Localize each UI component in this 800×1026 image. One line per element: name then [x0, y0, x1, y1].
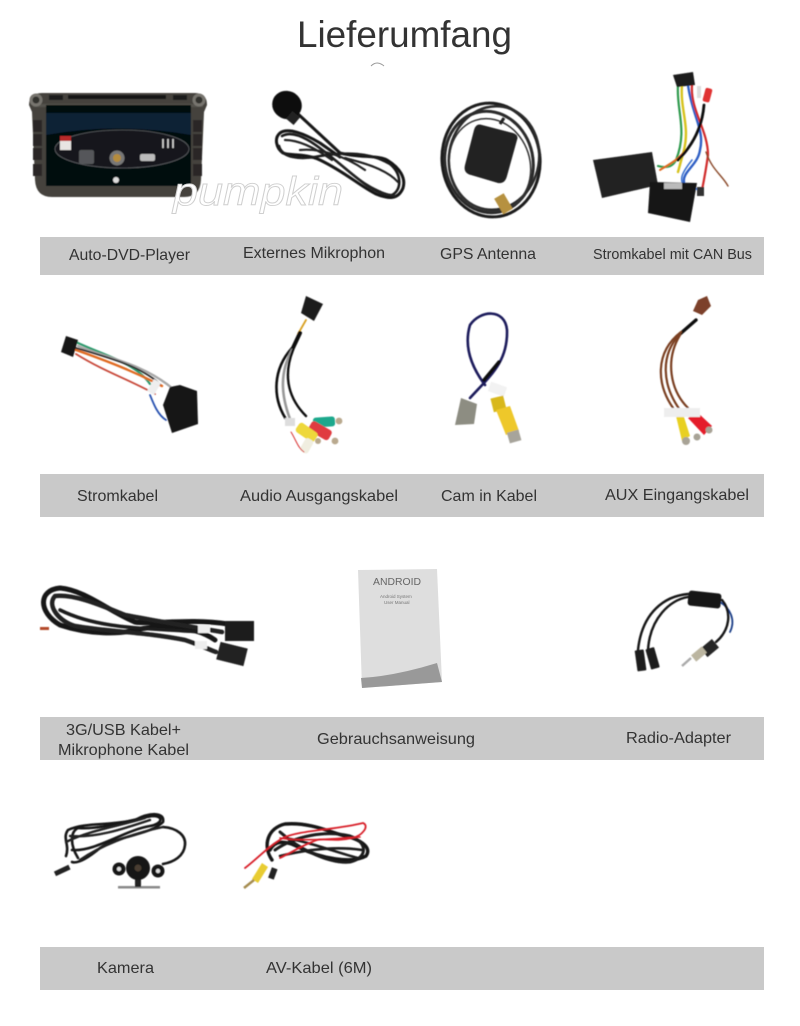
- label: Kamera: Kamera: [97, 960, 154, 977]
- label bar: row 2: [40, 474, 764, 517]
- icon: Android user manual: ANDROID: [373, 577, 421, 588]
- label: 3G/USB cable and microphone cable: [58, 722, 189, 759]
- label: 3G/USB cable and microphone cable: Mikrophone Kabel: [58, 742, 189, 759]
- label: Auto-DVD-Player: Auto-DVD-Player: [69, 247, 191, 264]
- icon: GPS antenna: [435, 98, 547, 222]
- label: GPS Antenna: GPS Antenna: [440, 246, 536, 263]
- title: Lieferumfang: [297, 14, 512, 55]
- icon: rear-view camera: [54, 814, 185, 888]
- icon: Android user manual: Android System: [380, 594, 412, 599]
- label: Externes Mikrophon: Externes Mikrophon: [243, 245, 385, 262]
- icon: Android user manual: [358, 569, 442, 688]
- icon: audio output cable: [276, 296, 342, 455]
- label: Stromkabel mit CAN Bus: Stromkabel mit CAN Bus: [593, 247, 752, 263]
- icon: power cable: [61, 336, 198, 433]
- icon: Android user manual: User Manual: [384, 600, 410, 605]
- icon: camera input cable: [455, 314, 521, 443]
- icon: 3G/USB and microphone cable: [40, 588, 254, 666]
- icon: power cable with CAN bus: [593, 72, 728, 222]
- label: AUX Eingangskabel: AUX Eingangskabel: [605, 487, 749, 504]
- icon: external microphone: [267, 86, 404, 198]
- label: AV-Kabel (6M): AV-Kabel (6M): [266, 960, 372, 977]
- label: Cam in Kabel: Cam in Kabel: [441, 488, 537, 505]
- icon: AUX input cable: [661, 296, 712, 445]
- label bar: row 3: [40, 717, 764, 760]
- label: Audio Ausgangskabel: Audio Ausgangskabel: [240, 488, 398, 505]
- label: Radio-Adapter: Radio-Adapter: [626, 730, 732, 747]
- icon: car DVD player: [29, 93, 207, 197]
- icon: radio adapter: [635, 590, 732, 671]
- label bar: row 4: [40, 947, 764, 990]
- label bar: row 1: [40, 237, 764, 275]
- icon: AV cable: [244, 823, 368, 888]
- watermark: pumpkin logo: pumpkin: [172, 170, 343, 214]
- label: 3G/USB cable and microphone cable: 3G/USB Kabel+: [66, 722, 181, 739]
- label: Stromkabel: Stromkabel: [77, 488, 158, 505]
- label: Gebrauchsanweisung: Gebrauchsanweisung: [317, 731, 475, 748]
